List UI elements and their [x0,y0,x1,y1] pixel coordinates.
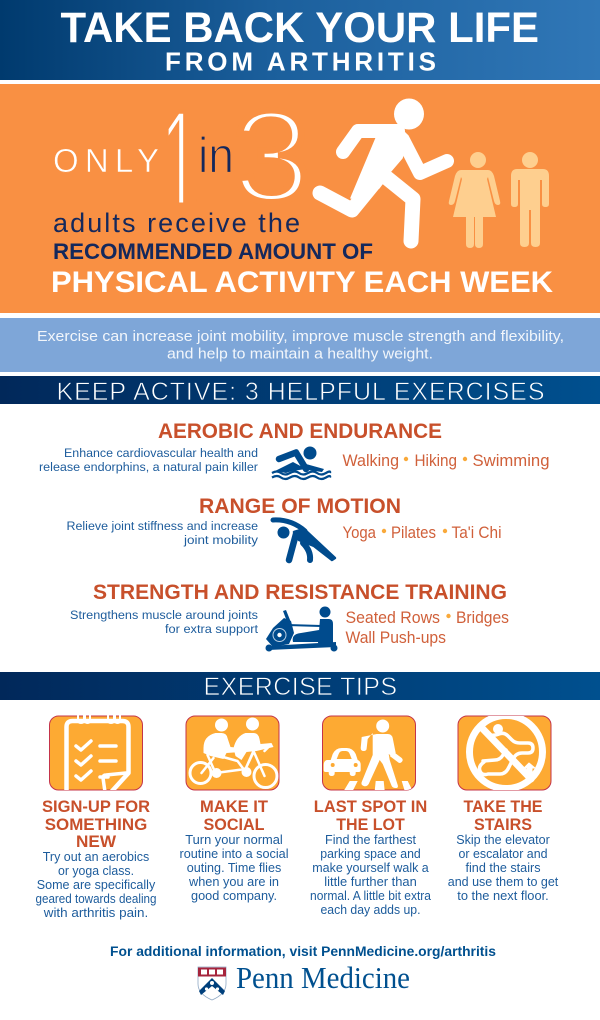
heading [42,798,150,851]
recommended amount of: RECOMMENDED AMOUNT OF [53,239,373,264]
panel: tip social [180,716,288,903]
body text: with arthritis pain. [43,906,148,920]
description: Strengthens muscle around joints [70,608,258,622]
description: Relieve joint stiffness and increase [66,519,258,533]
heading [464,798,542,834]
penn medicine logo [198,960,410,1000]
body text [448,833,559,903]
heading: SOMETHING [45,816,147,834]
body text: Some are specifically [37,878,156,892]
body text: little further than [324,875,417,889]
adults receive the: adults receive the [53,208,300,238]
body text: geared towards dealing [36,892,157,906]
body text: make yourself walk a [312,861,429,875]
only label: ONLY [53,142,159,179]
body text [36,850,157,920]
icon: no elevator, take stairs [458,716,551,790]
heading: LAST SPOT IN [314,798,427,816]
heading: THE LOT [336,816,405,834]
activities list [342,523,502,542]
body text: Skip the elevator [456,833,550,847]
header banner [0,0,600,80]
subtitle: FROM ARTHRITIS [165,46,436,76]
body text: to the next floor. [457,889,549,903]
activities list: Ta'i Chi [452,523,502,542]
body text: parking space and [320,847,421,861]
body text: Find the farthest [325,833,417,847]
heading: AEROBIC AND ENDURANCE [158,420,442,443]
activities list: Hiking [414,451,457,470]
body text: or yoga class. [58,864,134,878]
heading band: exercise tips: EXERCISE TIPS [204,673,397,701]
activities list: Pilates [391,523,436,542]
icon: pedestrian and car [322,716,416,791]
description [39,446,258,474]
body text: routine into a social [180,847,288,861]
activities list: Swimming [472,451,550,470]
description [70,608,259,636]
body text: good company. [191,889,277,903]
in label: in [198,128,234,184]
heading: SIGN-UP FOR [42,798,150,816]
panel: tip stairs [448,716,559,903]
body text: and use them to get [448,875,559,889]
icon: running figure [320,98,447,241]
big numeral 3: 3 [233,83,310,229]
heading: STAIRS [474,816,532,834]
panel: strength and resistance training [70,581,509,652]
panel: one in three statistic [0,80,600,313]
description [66,519,259,547]
icon: side stretch [273,520,335,560]
activities list: Seated Rows [346,608,440,627]
wordmark: Penn Medicine [236,960,410,995]
panel: one in three statistic: 1 [161,80,199,243]
activities list [342,451,550,470]
physical activity each week: PHYSICAL ACTIVITY EACH WEEK [51,266,553,299]
panel: intro band [0,318,600,372]
body text: or escalator and [458,847,548,861]
description: for extra support [165,622,259,636]
heading band: exercise tips [0,672,600,701]
icon: tandem bicycle [186,716,279,790]
activities list: Walking [342,451,399,470]
activities list: Bridges [456,608,509,627]
panel: intro band: Exercise can increase joint mobility, improve muscle strength and flexibility, [37,329,564,345]
description: release endorphins, a natural pain killer [39,460,258,474]
body text [310,833,431,917]
body text: find the stairs [466,861,540,875]
body text: Turn your normal [185,833,283,847]
icon: penn shield [198,967,226,1000]
activities list: Yoga [342,523,376,542]
heading: STRENGTH AND RESISTANCE TRAINING [93,581,507,604]
panel: tip parking [310,716,431,917]
body text: Try out an aerobics [43,850,149,864]
description: joint mobility [183,533,259,547]
footer note: For additional information, visit PennMedicine.org/arthritis [110,944,496,959]
body text: normal. A little bit extra [310,889,431,903]
heading [200,798,268,834]
heading band: keep active: KEEP ACTIVE: 3 HELPFUL EXERCISES [56,378,544,406]
heading: NEW [76,833,116,851]
heading: MAKE IT [200,798,268,816]
panel: tip sign-up [36,710,157,920]
activities list [346,608,509,647]
body text: each day adds up. [320,903,420,917]
heading: RANGE OF MOTION [199,495,401,518]
heading: TAKE THE [464,798,542,816]
description: Enhance cardiovascular health and [64,446,258,460]
panel: aerobic and endurance [39,420,550,479]
activities list: Wall Push-ups [346,628,446,647]
icon: woman figure [449,152,500,248]
body text: when you are in [188,875,279,889]
icon: rowing machine [266,606,338,652]
heading: SOCIAL [204,816,264,834]
body text: outing. Time flies [187,861,281,875]
body text [180,833,288,903]
panel: intro band: and help to maintain a healthy weight. [167,346,433,362]
heading [314,798,427,834]
icon: checklist [49,716,143,790]
panel: range of motion [66,495,502,560]
icon: swimmer [272,446,330,479]
icon: man figure [511,152,549,247]
title: TAKE BACK YOUR LIFE [60,4,539,52]
